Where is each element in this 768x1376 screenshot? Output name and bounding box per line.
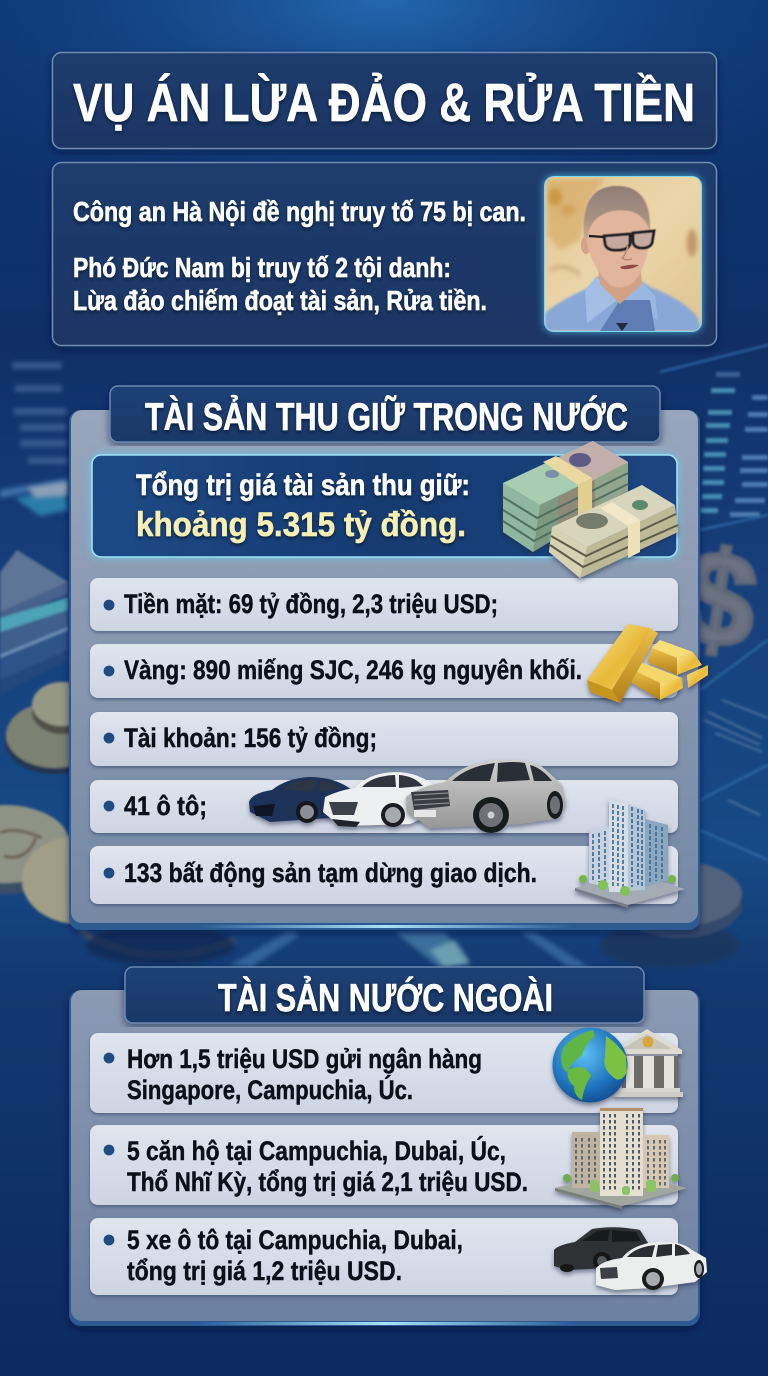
foreign cars text line 1: 5 xe ô tô tại Campuchia, Dubai, xyxy=(127,1225,463,1255)
cash text: Tiền mặt: 69 tỷ đồng, 2,3 triệu USD; xyxy=(124,589,498,619)
USD stack xyxy=(549,485,678,578)
bullet xyxy=(104,868,114,878)
bullet xyxy=(104,1053,114,1063)
bullet xyxy=(104,1235,114,1245)
apartments text line 2: Thổ Nhĩ Kỳ, tổng trị giá 2,1 triệu USD. xyxy=(127,1167,528,1197)
foreign section header xyxy=(125,967,644,1023)
accounts text: Tài khoản: 156 tỷ đồng; xyxy=(124,723,377,753)
bullet xyxy=(104,801,114,811)
shaved hair xyxy=(584,186,650,240)
intro text: charges line 2: Lừa đảo chiếm đoạt tài sản, Rửa tiền. xyxy=(73,285,487,316)
deposits text line 1: Hơn 1,5 triệu USD gửi ngân hàng xyxy=(127,1044,482,1074)
bullet xyxy=(104,600,114,610)
row: bank accounts xyxy=(90,712,678,766)
row: foreign apartments xyxy=(90,1125,678,1205)
total value label: Tổng trị giá tài sản thu giữ: xyxy=(136,469,470,502)
car: silver xyxy=(406,760,566,833)
row: gold xyxy=(90,644,678,698)
shirt xyxy=(545,276,701,331)
icon: gold bars xyxy=(587,624,708,703)
domestic section header xyxy=(110,386,660,442)
neck xyxy=(598,270,642,304)
foreign section heading: TÀI SẢN NƯỚC NGOÀI xyxy=(218,976,553,1020)
background: blurred shapes under panel xyxy=(80,923,740,968)
car: dark blue xyxy=(249,777,352,823)
foreign cars text line 2: tổng trị giá 1,2 triệu USD. xyxy=(127,1256,402,1286)
apartments text line 1: 5 căn hộ tại Campuchia, Dubai, Úc, xyxy=(127,1135,506,1166)
car: dark SUV xyxy=(554,1227,648,1272)
background: stacked slabs left xyxy=(0,550,68,695)
bullet xyxy=(104,733,114,743)
background: coin stack right xyxy=(618,862,742,938)
row: foreign cars xyxy=(90,1218,678,1295)
cars text: 41 ô tô; xyxy=(124,791,207,821)
total value box xyxy=(92,455,677,557)
nose and mouth xyxy=(622,246,632,260)
background: data screen left xyxy=(12,362,68,464)
portrait photo xyxy=(544,176,702,332)
background: dollar sign: $ xyxy=(672,521,765,677)
ear xyxy=(581,236,590,254)
icon: two foreign cars xyxy=(554,1227,707,1290)
background: data table right xyxy=(700,372,768,517)
gold text: Vàng: 890 miếng SJC, 246 kg nguyên khối. xyxy=(124,655,582,685)
icon: apartment towers xyxy=(555,1108,687,1209)
icon: money stacks xyxy=(503,441,678,578)
row: real estate xyxy=(90,846,678,904)
background: chart lines right xyxy=(704,700,768,815)
intro panel xyxy=(52,162,716,346)
intro text: charges line 1: Phó Đức Nam bị truy tố 2 tội danh: xyxy=(73,252,451,283)
panel: foreign assets xyxy=(69,967,700,1326)
deposits text line 2: Singapore, Campuchia, Úc. xyxy=(127,1074,413,1105)
background: screen frame lines right xyxy=(660,345,768,860)
real estate text: 133 bất động sản tạm dừng giao dịch. xyxy=(124,858,537,888)
title panel xyxy=(52,52,716,148)
total value amount: khoảng 5.315 tỷ đồng. xyxy=(136,506,466,544)
row: cars xyxy=(90,780,678,833)
VND stack xyxy=(503,441,628,552)
row: foreign bank deposits xyxy=(90,1033,678,1113)
row: cash xyxy=(90,578,678,631)
glasses xyxy=(604,231,654,250)
icon: globe xyxy=(552,1028,628,1102)
icon: bank building xyxy=(613,1029,683,1097)
head xyxy=(584,186,650,287)
domestic section heading: TÀI SẢN THU GIỮ TRONG NƯỚC xyxy=(145,395,628,439)
background: coins left xyxy=(0,682,134,924)
bullet xyxy=(104,1145,114,1155)
icon: three cars xyxy=(249,760,566,833)
intro text: number of defendants: Công an Hà Nội đề nghị truy tố 75 bị can. xyxy=(73,196,526,227)
car: white sedan xyxy=(596,1242,707,1290)
bullet xyxy=(104,666,114,676)
car: white xyxy=(323,772,437,827)
icon: office buildings xyxy=(575,798,685,908)
background: screen glow left xyxy=(0,478,68,516)
panel: domestic assets xyxy=(69,386,700,930)
